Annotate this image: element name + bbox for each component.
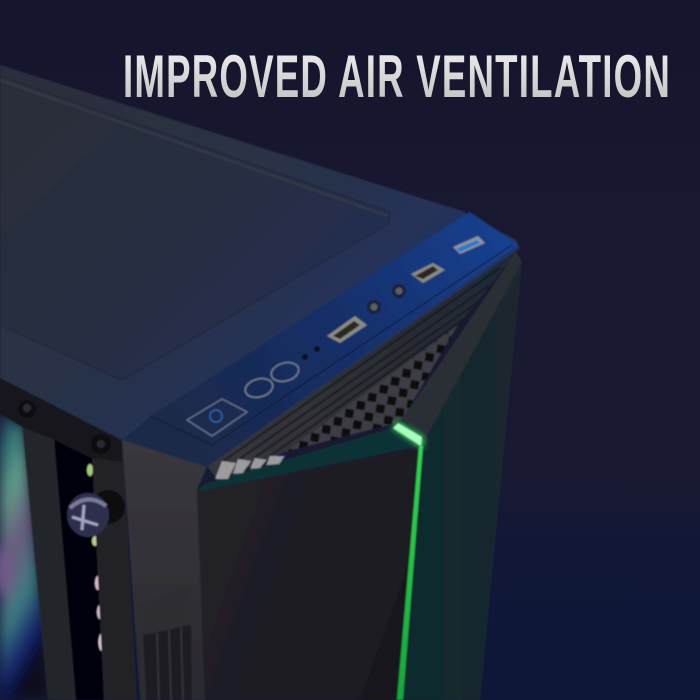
louvre tips (215, 456, 285, 479)
indicator LEDs (302, 346, 320, 360)
green light bar (392, 421, 424, 700)
top panel of case (0, 65, 520, 467)
top frame bar with screws (0, 378, 122, 462)
USB port 3 (453, 236, 485, 254)
USB port 2 (411, 263, 445, 283)
gray triangular facet (403, 252, 522, 438)
I/O strip (122, 212, 518, 467)
right side teal panel (396, 262, 522, 700)
round buttons (243, 360, 301, 400)
gray corner column (122, 440, 207, 700)
vent notch (139, 585, 192, 700)
USB port 1 (327, 316, 367, 343)
glass frame column (22, 426, 76, 700)
thumbscrew (67, 490, 125, 537)
teal wedge above front panel (197, 428, 420, 492)
inner dark gap and LEDs (50, 436, 108, 700)
fan glimpse behind glass (0, 412, 50, 700)
screw rail column (92, 440, 137, 700)
power button (187, 399, 247, 436)
mesh ventilation (285, 325, 458, 452)
louvres (207, 247, 518, 480)
front panel (197, 448, 420, 700)
inset recess on top panel (0, 76, 390, 380)
audio jacks (367, 284, 406, 314)
PC case (0, 65, 522, 700)
